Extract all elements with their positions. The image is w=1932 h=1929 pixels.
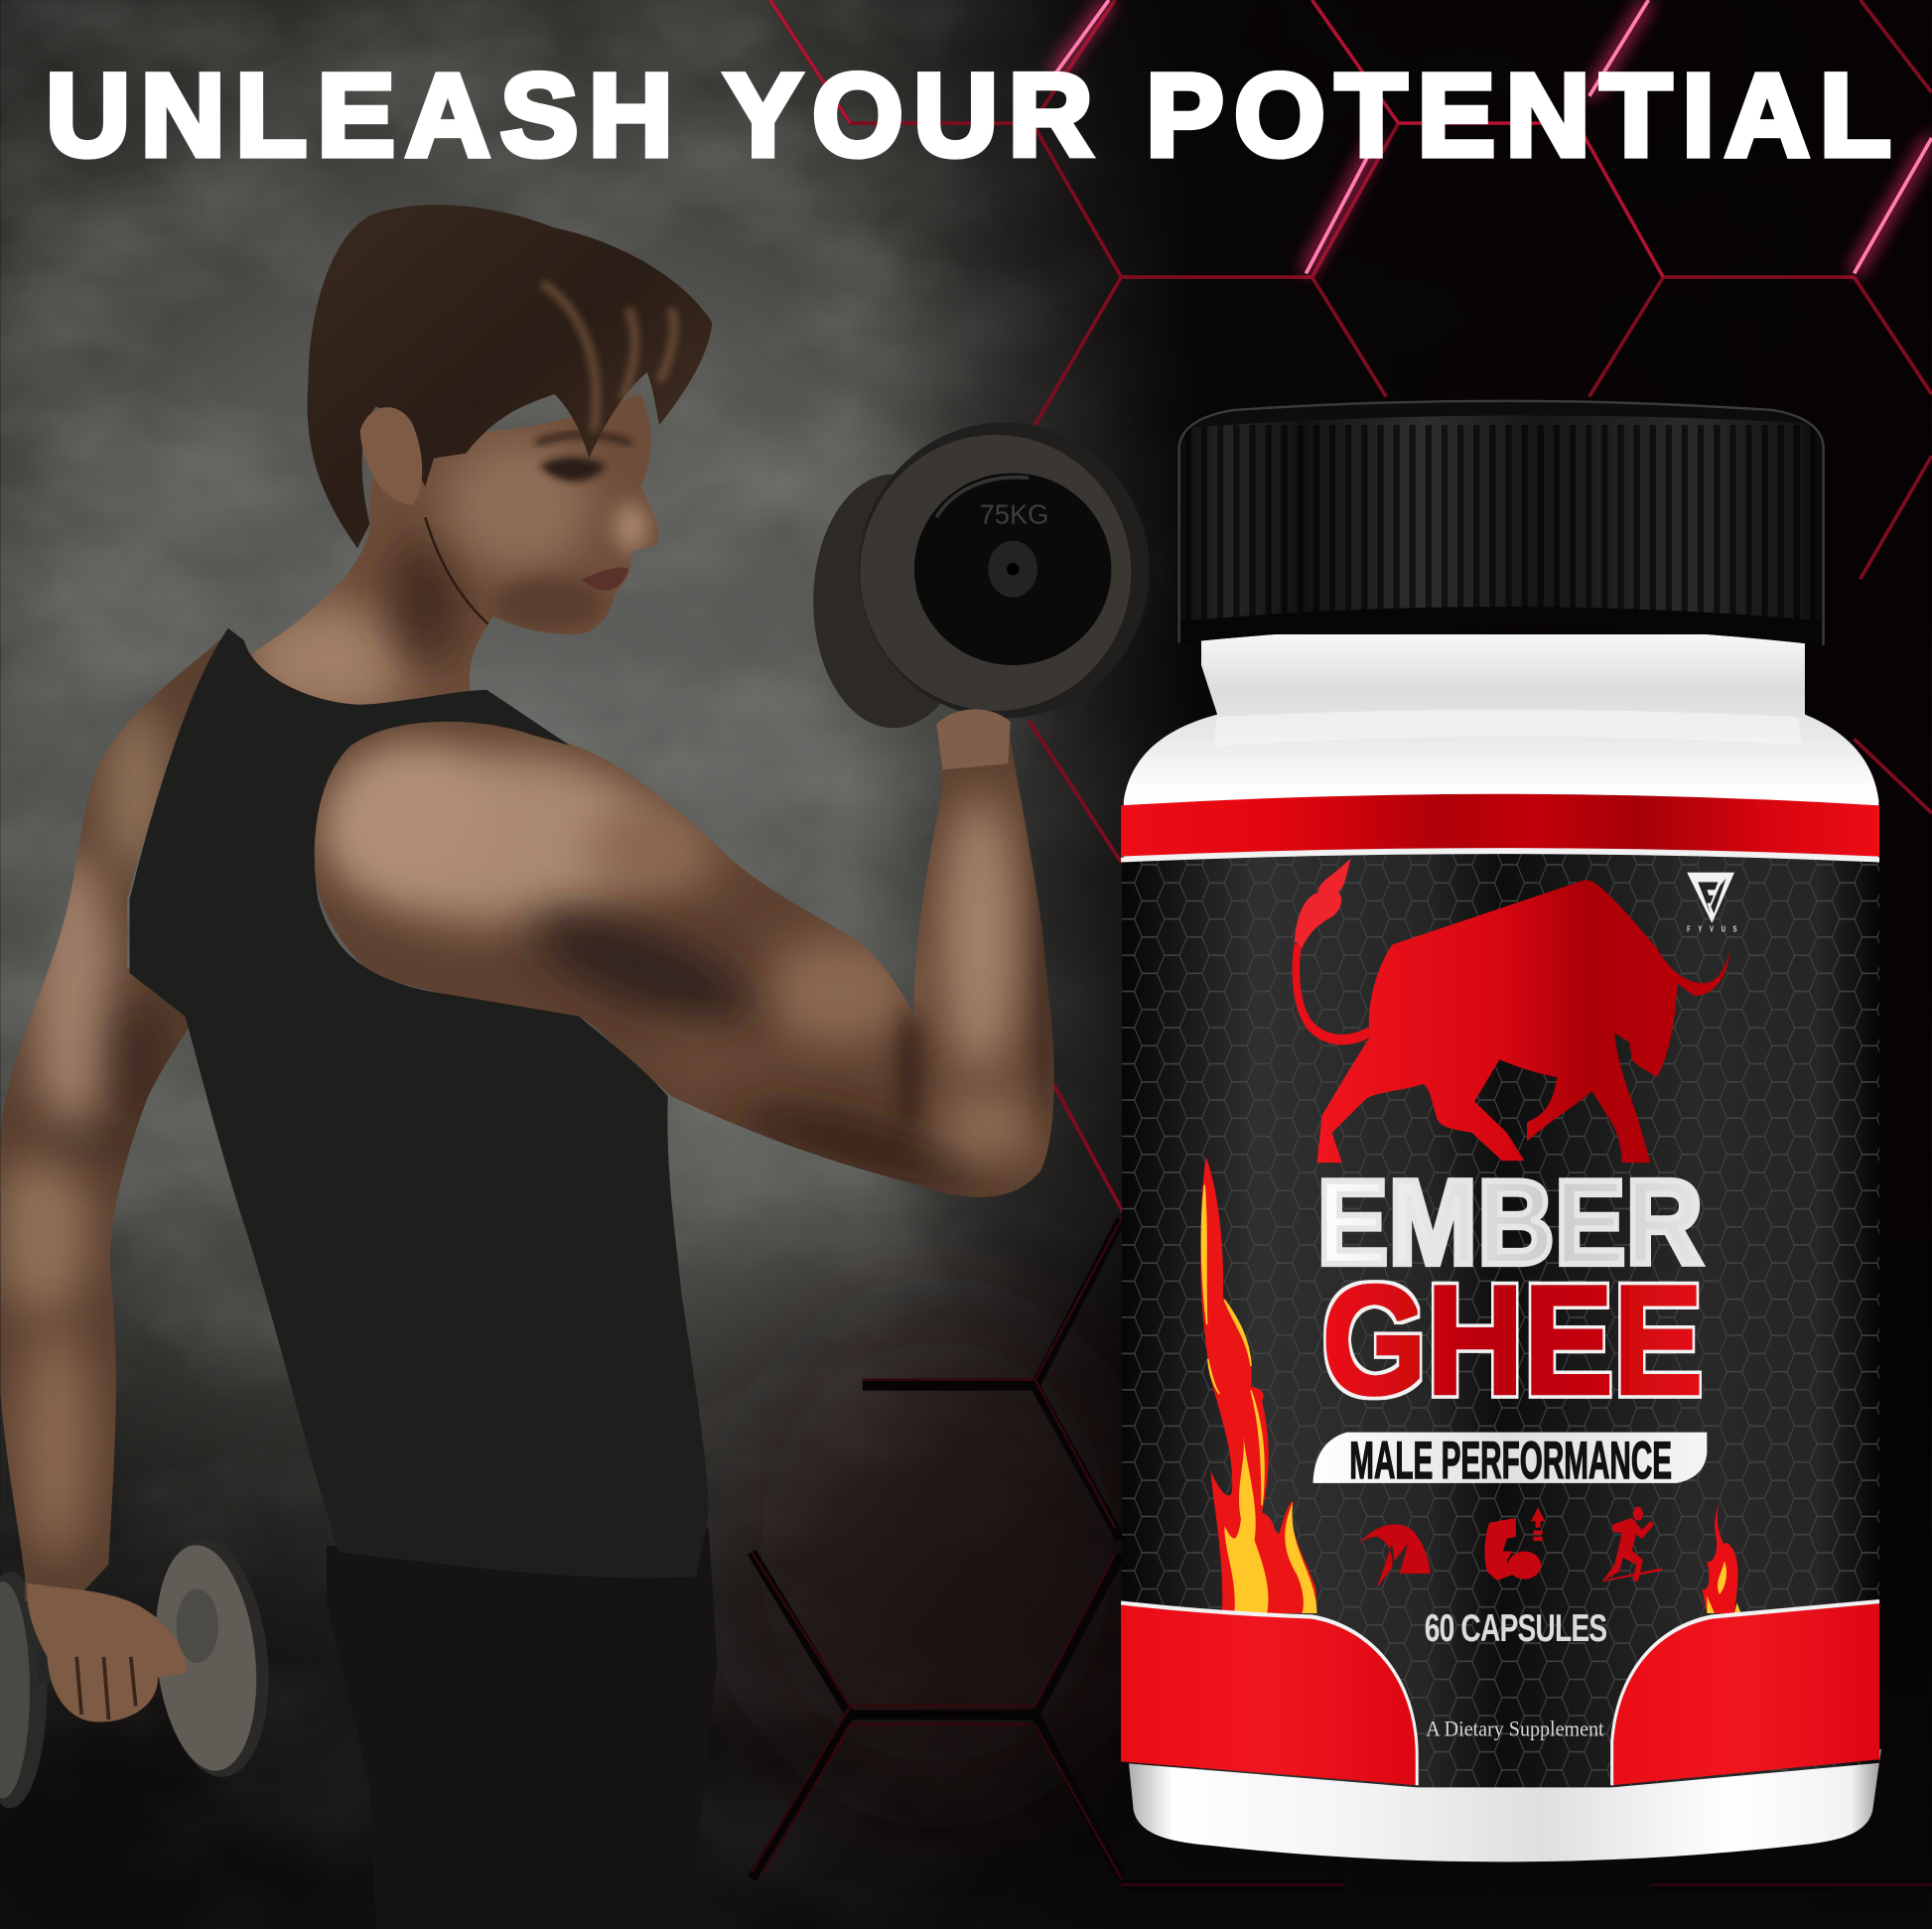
right hand fingers on dumbbell bbox=[936, 709, 1011, 769]
bottle shoulder and neck bbox=[1124, 634, 1878, 863]
icon: flexed arm with pill and arrow bbox=[1484, 1507, 1545, 1581]
60 capsules text: 60 CAPSULES bbox=[1425, 1607, 1607, 1650]
top dumbbell: 75KG bbox=[980, 498, 1048, 529]
icon: running man bbox=[1602, 1507, 1662, 1582]
product bottle bbox=[1121, 394, 1881, 1861]
left hand bbox=[27, 1583, 188, 1722]
left arm bbox=[0, 639, 221, 1601]
product name EMBER: EMBER bbox=[1317, 1155, 1703, 1290]
top red band bbox=[1121, 794, 1879, 860]
black tank top bbox=[130, 628, 709, 1578]
background: hexagon grid lines bbox=[752, 0, 1932, 1884]
headline: UNLEASH YOUR POTENTIAL bbox=[46, 49, 1891, 180]
red bull logo bbox=[1295, 858, 1729, 1163]
red corner panel left bbox=[1121, 1602, 1417, 1785]
big flame bbox=[1200, 1158, 1317, 1613]
pill: male performance: MALE PERFORMANCE bbox=[1349, 1431, 1672, 1489]
brand logo FYVUS bbox=[1687, 873, 1737, 934]
small flame bbox=[1702, 1502, 1741, 1613]
brand logo FYVUS: FYVUS bbox=[1687, 923, 1737, 934]
ear bbox=[360, 407, 422, 505]
shorts bbox=[327, 1528, 717, 1929]
top dumbbell bbox=[813, 423, 1150, 728]
label bbox=[1121, 794, 1879, 1787]
bottle base bbox=[1128, 1749, 1881, 1861]
man lifting dumbbells bbox=[0, 205, 1150, 1929]
lower dumbbell bbox=[0, 1534, 280, 1808]
cap bbox=[1171, 394, 1836, 653]
icon: speedometer with bolt bbox=[1357, 1524, 1431, 1587]
hair bbox=[307, 205, 712, 548]
red corner panel right bbox=[1612, 1601, 1879, 1785]
neck and face bbox=[252, 394, 659, 705]
dark label panel bbox=[1122, 852, 1879, 1787]
product name GHEE: GHEE bbox=[1322, 1253, 1703, 1427]
dietary supplement text: A Dietary Supplement bbox=[1426, 1718, 1604, 1741]
raised right arm bbox=[314, 721, 1054, 1197]
